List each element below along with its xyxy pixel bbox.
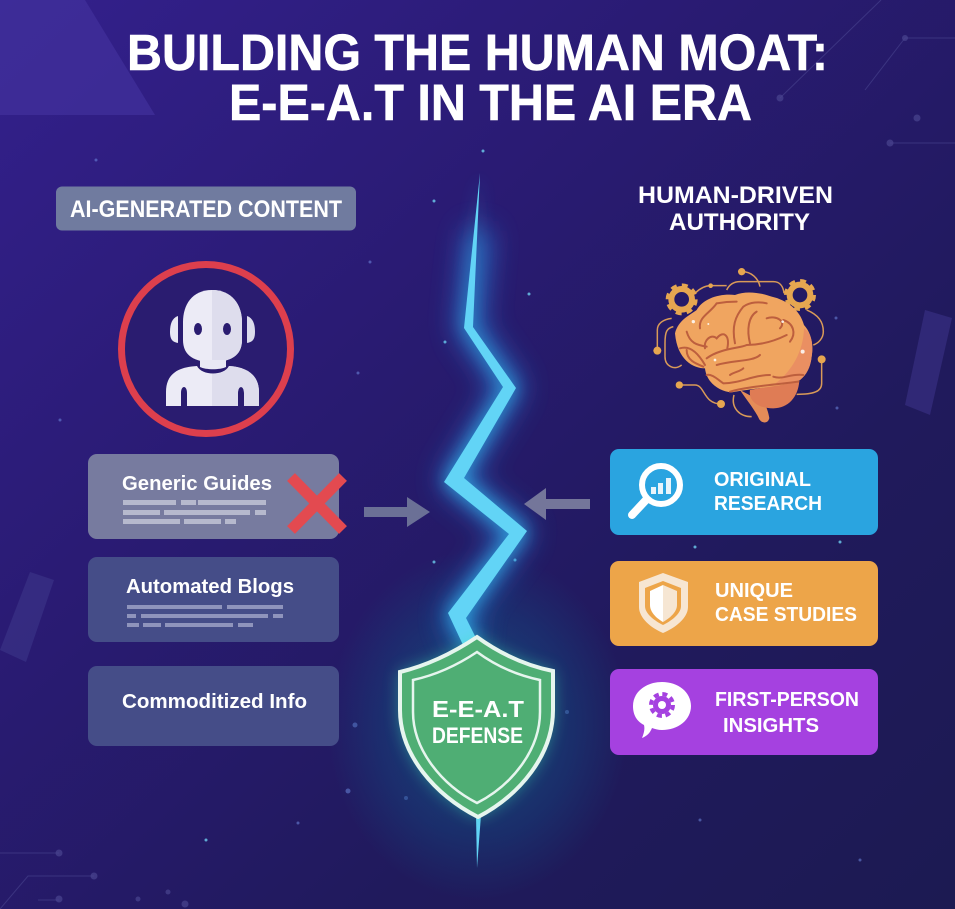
heading: human-driven authority: HUMAN-DRIVEN xyxy=(638,182,833,209)
card: Unique Case Studies: CASE STUDIES xyxy=(715,604,857,626)
icon: robot in red circle xyxy=(122,264,290,434)
arrow: left to center xyxy=(364,497,430,527)
card: Original Research: RESEARCH xyxy=(714,493,822,515)
label: AI-generated content xyxy=(56,186,356,230)
title: E-E-A.T IN THE AI ERA xyxy=(229,74,752,131)
title: BUILDING THE HUMAN MOAT: xyxy=(127,24,828,81)
heading: human-driven authority xyxy=(638,182,833,236)
E-E-A.T defense shield: E-E-A.T xyxy=(432,696,524,722)
card: Automated Blogs: Automated Blogs xyxy=(126,576,294,598)
E-E-A.T defense shield: DEFENSE xyxy=(432,723,523,748)
icon: left gear xyxy=(667,285,696,314)
icon: speech bubble with gear xyxy=(633,682,691,738)
icon: magnifier with chart xyxy=(632,466,680,515)
lightning bolt xyxy=(444,173,527,645)
card: Automated Blogs xyxy=(88,557,339,642)
arrow: right to center xyxy=(524,488,590,520)
card: First-Person Insights xyxy=(610,669,878,755)
E-E-A.T defense shield xyxy=(400,637,553,817)
card: Unique Case Studies xyxy=(610,561,878,646)
card: Unique Case Studies: UNIQUE xyxy=(715,580,793,602)
card: Commoditized Info: Commoditized Info xyxy=(122,691,307,713)
label: AI-generated content: AI-GENERATED CONTENT xyxy=(70,196,342,223)
icon: red cross xyxy=(291,477,343,530)
icon: right gear xyxy=(786,281,814,309)
shield ambient glow xyxy=(328,550,628,900)
card: First-Person Insights: INSIGHTS xyxy=(723,715,819,737)
card: Original Research xyxy=(610,449,878,535)
card: Generic Guides xyxy=(88,454,343,539)
lower bolt spike xyxy=(476,815,481,868)
card: Commoditized Info xyxy=(88,666,339,746)
title xyxy=(127,24,828,131)
card: Original Research: ORIGINAL xyxy=(714,469,811,491)
icon: brain with gears xyxy=(653,268,826,422)
card: Generic Guides: Generic Guides xyxy=(122,473,272,495)
icon: shield xyxy=(639,573,688,633)
heading: human-driven authority: AUTHORITY xyxy=(669,209,810,236)
card: First-Person Insights: FIRST-PERSON xyxy=(715,689,859,711)
